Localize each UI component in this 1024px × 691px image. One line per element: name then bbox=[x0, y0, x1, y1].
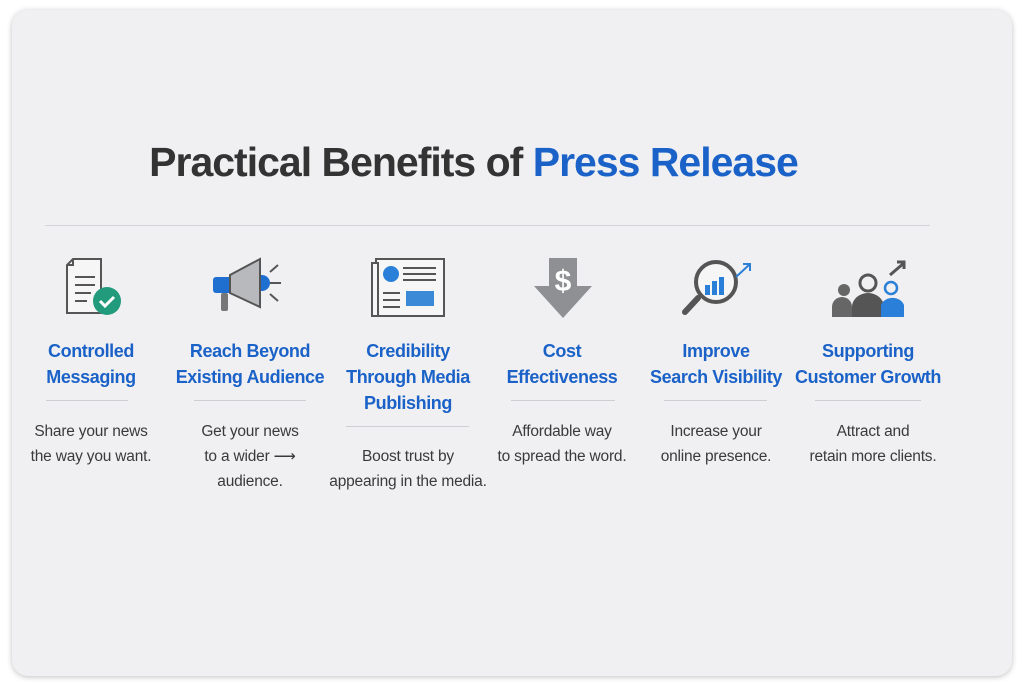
description: appearing in the media. bbox=[329, 473, 487, 490]
heading bbox=[650, 341, 782, 387]
icon: people growth bbox=[832, 260, 906, 317]
heading: Cost bbox=[543, 341, 581, 361]
icon: newspaper bbox=[371, 258, 445, 317]
panel: credibility bbox=[329, 258, 487, 490]
heading: Credibility bbox=[366, 341, 450, 361]
panel: controlled messaging bbox=[30, 258, 151, 465]
description: Increase your bbox=[670, 423, 762, 440]
panel: search visibility bbox=[650, 260, 782, 465]
icon: magnifier chart bbox=[682, 260, 751, 315]
title: Practical Benefits of Press Release bbox=[149, 139, 798, 185]
description bbox=[329, 448, 487, 490]
heading bbox=[507, 341, 617, 387]
description: audience. bbox=[217, 473, 283, 490]
description: retain more clients. bbox=[810, 448, 936, 465]
description: Affordable way bbox=[512, 423, 612, 440]
description: the way you want. bbox=[31, 448, 151, 465]
heading: Improve bbox=[682, 341, 750, 361]
heading: Publishing bbox=[364, 393, 452, 413]
description: online presence. bbox=[661, 448, 771, 465]
icon: megaphone bbox=[213, 257, 281, 311]
description bbox=[661, 423, 771, 465]
heading bbox=[346, 341, 470, 413]
panel: reach beyond bbox=[176, 257, 324, 490]
heading bbox=[795, 341, 941, 387]
description bbox=[498, 423, 626, 465]
icon: dollar arrow: $ bbox=[555, 265, 572, 298]
description: to a wider ⟶ bbox=[204, 448, 296, 465]
description: Share your news bbox=[34, 423, 148, 440]
panel: customer growth bbox=[795, 260, 941, 465]
heading: Customer Growth bbox=[795, 367, 941, 387]
description: to spread the word. bbox=[498, 448, 626, 465]
heading bbox=[176, 341, 324, 387]
heading: Supporting bbox=[822, 341, 914, 361]
heading: Messaging bbox=[46, 367, 136, 387]
description bbox=[201, 423, 299, 490]
heading: Controlled bbox=[48, 341, 134, 361]
icon: dollar arrow bbox=[534, 258, 592, 318]
heading: Existing Audience bbox=[176, 367, 324, 387]
description: Boost trust by bbox=[362, 448, 454, 465]
description: Attract and bbox=[837, 423, 909, 440]
heading: Through Media bbox=[346, 367, 470, 387]
description bbox=[810, 423, 936, 465]
description: Get your news bbox=[201, 423, 299, 440]
heading: Reach Beyond bbox=[190, 341, 310, 361]
heading bbox=[46, 341, 136, 387]
heading: Search Visibility bbox=[650, 367, 782, 387]
icon: document check bbox=[66, 258, 121, 315]
panel: cost effectiveness bbox=[498, 258, 626, 465]
heading: Effectiveness bbox=[507, 367, 617, 387]
description bbox=[30, 423, 151, 465]
